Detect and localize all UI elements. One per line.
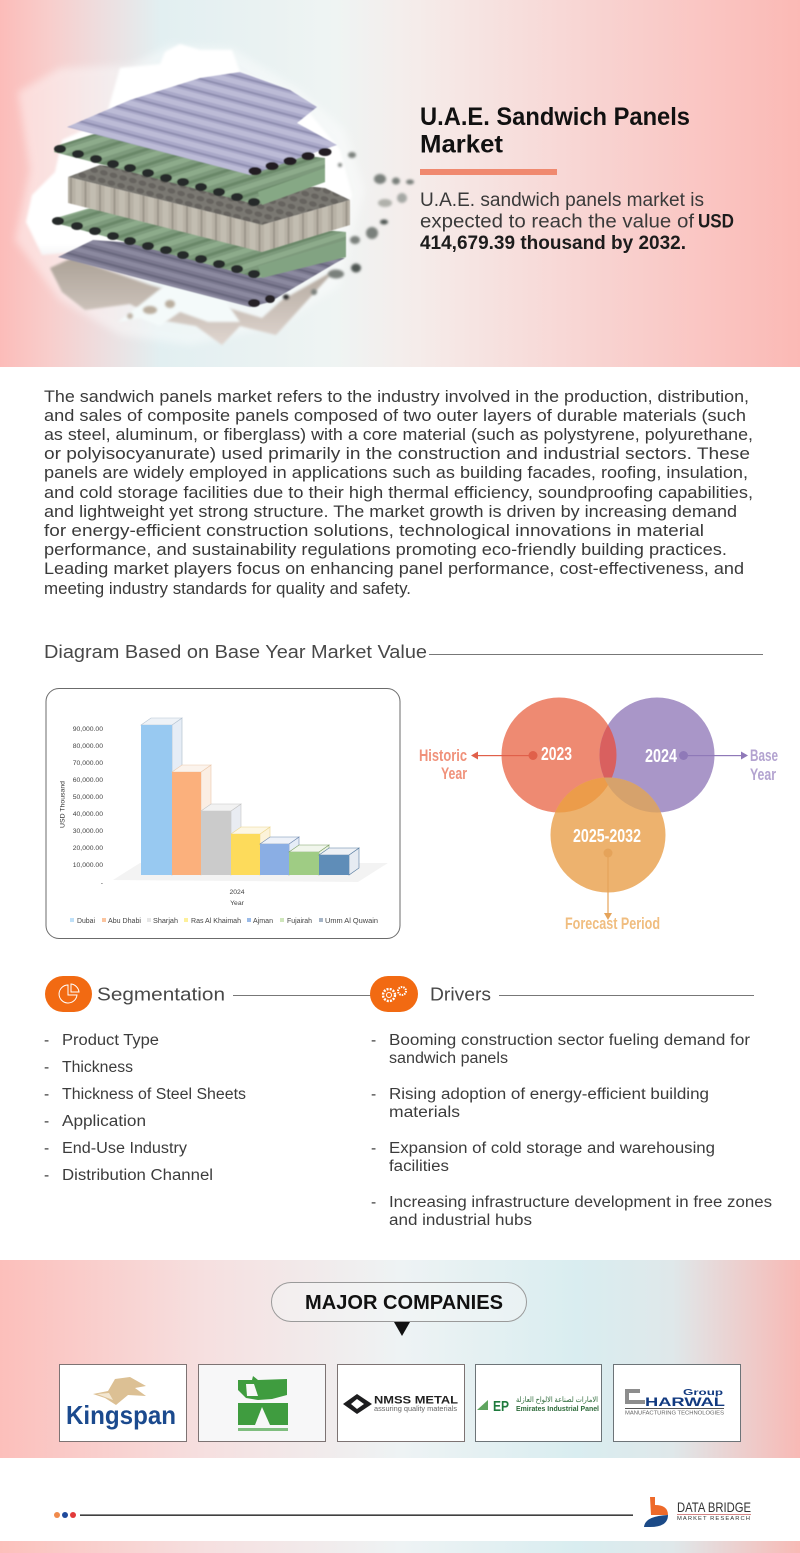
splash: shadow under panels	[50, 258, 335, 345]
arrow: historic year	[471, 751, 538, 760]
layer: top metal sheet	[67, 72, 337, 175]
title underline accent	[420, 169, 557, 175]
heading: major companies	[272, 1282, 526, 1322]
list: segmentation items: Thickness of Steel Sheets	[62, 1086, 246, 1103]
logo card: Kingspan	[60, 1364, 186, 1442]
bar: Fujairah	[289, 845, 329, 875]
y axis labels: 70,000.00	[73, 760, 103, 767]
y axis labels: 50,000.00	[73, 794, 103, 801]
list: drivers items: Expansion of cold storage and warehousing	[389, 1140, 715, 1157]
text: market value summary	[420, 190, 734, 254]
heading: report title: U.A.E. Sandwich Panels	[420, 103, 690, 131]
list: segmentation items: Product Type	[62, 1032, 159, 1049]
heading: drivers: Drivers	[430, 984, 491, 1004]
splash: white paint	[26, 44, 352, 300]
x axis labels	[229, 889, 245, 907]
circle: historic year	[502, 698, 616, 812]
chart legend: Ras Al Khaimah	[191, 918, 241, 925]
list: drivers items: materials	[389, 1104, 460, 1121]
header background band	[0, 0, 800, 367]
chart legend: Umm Al Quwain	[325, 918, 378, 925]
logo card: Emirates Industrial Panel: Emirates Industrial Panel	[516, 1404, 599, 1413]
list: segmentation items: Thickness	[62, 1059, 133, 1076]
y axis title: USD Thousand	[60, 781, 66, 828]
logo card: NMSS Metal: NMSS METAL	[374, 1394, 458, 1406]
overlap: historic and base	[600, 725, 616, 778]
y axis labels: 30,000.00	[73, 828, 103, 835]
divider: segmentation to drivers	[233, 995, 371, 996]
text: market description paragraph: meeting industry standards for quality and safety.	[44, 580, 411, 598]
logo: Data Bridge Market Research	[644, 1497, 751, 1527]
layer: upper green sheet	[54, 132, 325, 206]
venn diagram: historic, base and forecast years	[419, 698, 778, 933]
bar: Ras Al Khaimah	[231, 827, 270, 875]
text: market description paragraph: and cold storage facilities due to their high thermal efficiency, soundproofing capabilities,	[44, 484, 753, 502]
list: segmentation items: End-Use Industry	[62, 1140, 187, 1157]
chart panel: 3D bar chart	[46, 688, 400, 938]
bar: Sharjah	[201, 804, 241, 875]
y axis labels: 10,000.00	[73, 862, 103, 869]
list: segmentation items: Application	[62, 1113, 146, 1130]
illustration: sandwich panel layers	[15, 44, 414, 345]
list: drivers items: Booming construction sector fueling demand for	[389, 1032, 750, 1049]
list: drivers items: -	[371, 1086, 376, 1103]
chart legend: Dubai	[77, 918, 95, 925]
list: segmentation items: -	[44, 1086, 49, 1103]
y axis labels: 20,000.00	[73, 845, 103, 852]
heading: report title: Market	[420, 130, 504, 158]
label: 2025-2032: 2025-2032	[573, 826, 641, 846]
list: drivers items: sandwich panels	[389, 1050, 508, 1067]
chart legend	[70, 918, 378, 925]
footer line	[80, 1514, 633, 1516]
heading: diagram section: Diagram Based on Base Year Market Value	[44, 642, 427, 662]
list: segmentation items: -	[44, 1113, 49, 1130]
chart legend: Fujairah	[287, 918, 312, 925]
label: base year	[750, 746, 778, 784]
y axis labels: 90,000.00	[73, 726, 103, 733]
bar: Dubai	[141, 718, 182, 875]
list: drivers items: -	[371, 1032, 376, 1049]
list: segmentation items	[44, 1032, 246, 1184]
text: market description paragraph: for energy-efficient construction solutions, technological innovations in material	[44, 522, 704, 540]
footer dots	[54, 1512, 76, 1518]
label: historic year: Year	[441, 764, 467, 783]
label: historic year	[419, 746, 467, 783]
logo card: Kingspan: Kingspan	[66, 1400, 176, 1430]
logo card: NMSS Metal	[338, 1364, 464, 1442]
layer: bottom metal sheet	[58, 240, 345, 307]
list: drivers items: Rising adoption of energy-efficient building	[389, 1086, 709, 1103]
list: segmentation items: -	[44, 1032, 49, 1049]
chart floor	[113, 863, 388, 882]
splash: lower white drip	[118, 285, 240, 326]
text: market description paragraph	[44, 388, 753, 598]
list: drivers items: facilities	[389, 1158, 449, 1175]
label: 2023: 2023	[541, 744, 572, 764]
list: segmentation items: -	[44, 1059, 49, 1076]
layer: lower green sheet	[52, 208, 346, 278]
text: market value summary: USD	[698, 212, 734, 232]
list: segmentation items: -	[44, 1140, 49, 1157]
text: market description paragraph: panels are widely employed in applications such as building facades, roofing, insulation,	[44, 464, 748, 482]
text: market description paragraph: and lightweight yet strong structure. The market growth is driven by increasing demand	[44, 503, 737, 521]
text: market value summary: 414,679.39 thousand by 2032.	[420, 233, 686, 254]
x axis labels: Year	[230, 900, 245, 907]
label: forecast period: Forecast Period	[565, 914, 660, 933]
chart legend: Abu Dhabi	[108, 918, 141, 925]
logo card: Emirates Industrial Panel	[476, 1364, 602, 1442]
circle: base year	[600, 698, 714, 812]
text: market description paragraph: as steel, aluminum, or fiberglass) with a core material (such as polystyrene, polyurethane,	[44, 426, 753, 444]
bar: Abu Dhabi	[172, 765, 211, 875]
text: market description paragraph: or polyisocyanurate) used primarily in the construction and industrial sectors. These	[44, 445, 750, 463]
circle: forecast period	[550, 778, 666, 892]
overlap: base and forecast	[604, 778, 661, 812]
logo: Data Bridge Market Research: DATA BRIDGE	[677, 1499, 751, 1515]
list: segmentation items: -	[44, 1167, 49, 1184]
text: market description paragraph: and sales of composite panels composed of two outer layers of durable materials (such	[44, 407, 746, 425]
y axis labels: 80,000.00	[73, 743, 103, 750]
list: segmentation items: Distribution Channel	[62, 1167, 213, 1184]
text: market description paragraph: performance, and sustainability regulations promoting eco-friendly building practices.	[44, 541, 727, 559]
arrow: base year	[679, 751, 748, 760]
logo card: Harwal Group	[614, 1364, 740, 1442]
text: market description paragraph: Leading market players focus on enhancing panel performance, cost-effectiveness, and	[44, 560, 744, 578]
heading: major companies: MAJOR COMPANIES	[305, 1292, 503, 1314]
list: drivers items: Increasing infrastructure development in free zones	[389, 1194, 772, 1211]
heading: report title	[420, 103, 690, 158]
chart legend: Ajman	[253, 918, 273, 925]
heading: segmentation: Segmentation	[97, 984, 225, 1004]
companies background band	[0, 1260, 800, 1458]
label: base year: Year	[750, 765, 776, 784]
label: historic year: Historic	[419, 746, 467, 765]
layer: honeycomb core	[68, 165, 350, 252]
list: drivers items: -	[371, 1194, 376, 1211]
splash: pale outer wash	[15, 45, 365, 345]
logo card: Emirates Industrial Panel: الامارات لصناعة الالواح العازلة	[516, 1395, 598, 1404]
logo card: green company logo	[198, 1364, 326, 1442]
text: market value summary: expected to reach the value of	[420, 212, 695, 232]
bar: Ajman	[260, 837, 299, 875]
y axis labels: 40,000.00	[73, 811, 103, 818]
y axis labels: -	[101, 880, 103, 887]
arrow: forecast period	[604, 848, 612, 920]
logo card: Harwal Group: HARWAL	[645, 1395, 725, 1409]
icon: segmentation pie chart	[45, 976, 92, 1012]
chart legend: Sharjah	[153, 918, 178, 925]
footer gradient band	[0, 1541, 800, 1553]
arrow: down to companies	[394, 1322, 410, 1336]
y axis labels: 60,000.00	[73, 777, 103, 784]
logo: Data Bridge Market Research: MARKET RESEARCH	[677, 1516, 751, 1522]
text: market description paragraph: The sandwich panels market refers to the industry involved in the production, distribution,	[44, 388, 749, 406]
icon: drivers gears	[370, 976, 418, 1012]
text: market value summary: U.A.E. sandwich panels market is	[420, 190, 704, 211]
y axis labels	[73, 726, 103, 887]
list: drivers items: and industrial hubs	[389, 1212, 532, 1229]
x axis labels: 2024	[229, 889, 245, 896]
logo card: Harwal Group: Group	[683, 1388, 723, 1397]
logo card: Emirates Industrial Panel: EP	[493, 1398, 509, 1415]
splash: flecks	[127, 152, 414, 319]
logo card: NMSS Metal: assuring quality materials	[374, 1404, 457, 1413]
list: drivers items	[371, 1032, 772, 1229]
bar: Umm Al Quwain	[319, 848, 359, 875]
label: base year: Base	[750, 746, 778, 765]
list: drivers items: -	[371, 1140, 376, 1157]
label: 2024: 2024	[645, 746, 677, 766]
logo card: Harwal Group: MANUFACTURING TECHNOLOGIES	[625, 1410, 724, 1416]
overlap: historic and forecast	[555, 778, 608, 812]
